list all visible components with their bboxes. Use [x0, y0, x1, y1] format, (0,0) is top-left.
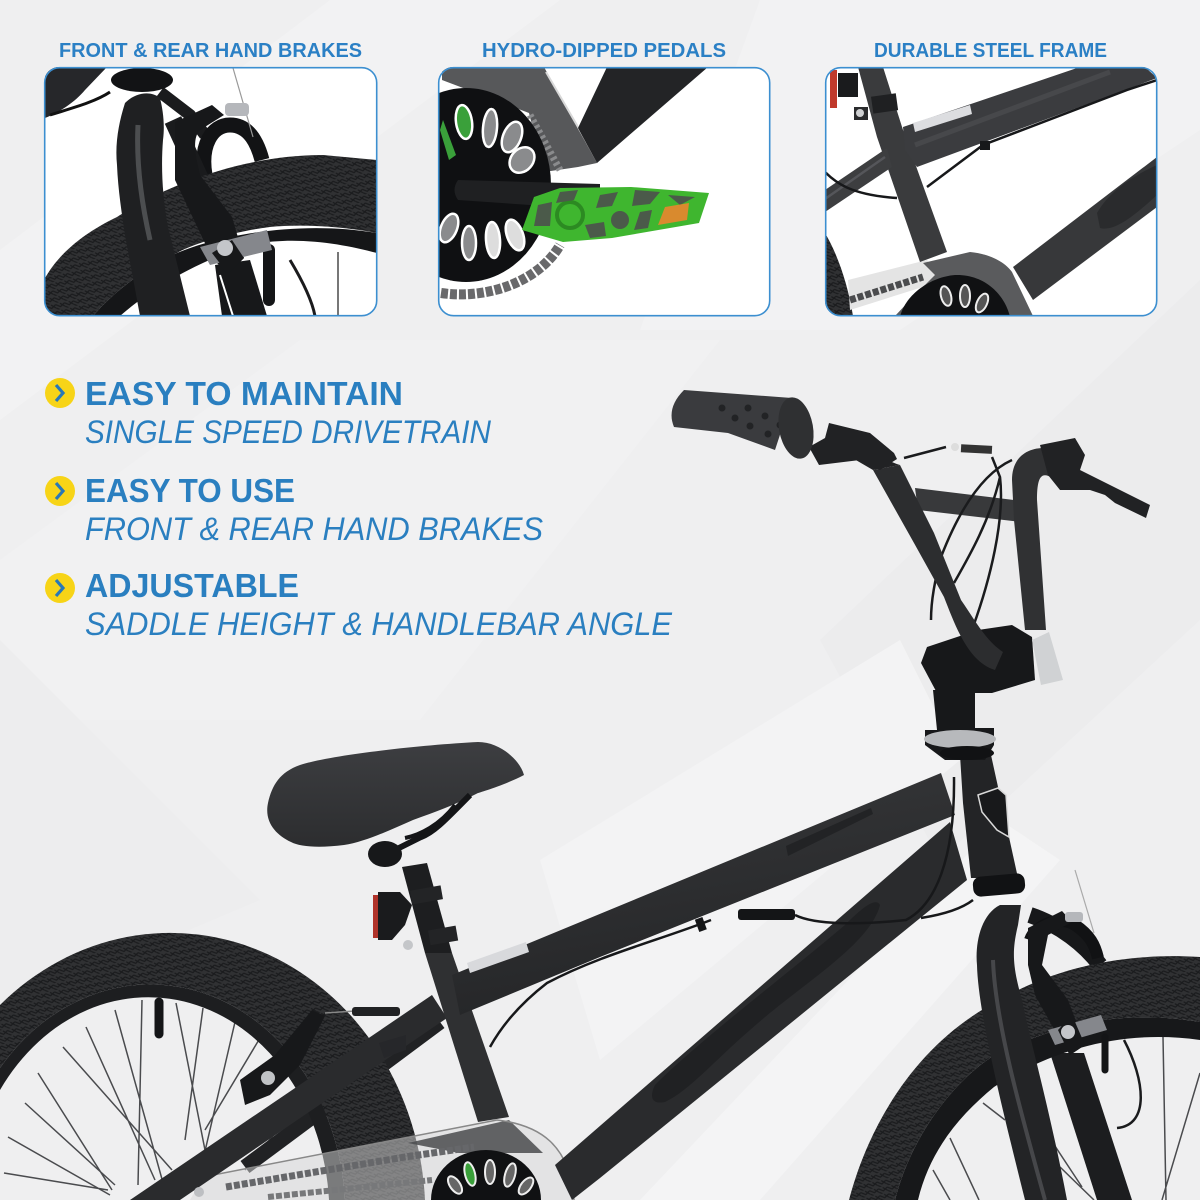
panel: brake close-up [44, 67, 377, 316]
feature: adjustable: ADJUSTABLE [85, 567, 299, 604]
feature: easy to maintain: EASY TO MAINTAIN [85, 375, 403, 412]
tire [0, 933, 425, 1200]
brake arm [175, 105, 244, 274]
down tube [555, 822, 967, 1200]
icon: chevron 1 [45, 378, 75, 408]
rear wheel [0, 933, 440, 1200]
sticker [913, 105, 972, 132]
fork rear leg [1050, 1053, 1132, 1200]
sprocket [440, 88, 551, 282]
seat tube and post [858, 67, 947, 262]
sticker [467, 942, 529, 973]
rear thin stay [245, 1022, 440, 1167]
cable [825, 80, 1157, 198]
sprocket [431, 1150, 541, 1200]
rim [0, 984, 345, 1200]
seat post [402, 863, 452, 953]
rim [93, 228, 377, 316]
feature list [45, 375, 673, 642]
fork [977, 870, 1107, 1200]
rear fork leg [215, 260, 267, 316]
top tube [452, 773, 955, 1015]
handlebar [672, 390, 1150, 693]
rear brake [240, 1010, 325, 1105]
brake arch [1030, 921, 1098, 958]
saddle [267, 742, 524, 867]
cables [490, 777, 973, 1047]
seat stay [130, 995, 447, 1200]
valve [154, 1002, 164, 1034]
chain guard and sprocket [848, 260, 935, 310]
front wheel [849, 915, 1200, 1200]
feature: easy to use: EASY TO USE [85, 472, 295, 509]
fork tube [116, 93, 190, 316]
heading: front and rear hand brakes: FRONT & REAR HAND BRAKES [59, 40, 362, 62]
crossbar [915, 488, 1030, 523]
head tube [960, 755, 1018, 878]
icon: chevron 3 [45, 573, 75, 603]
panel: steel frame close-up [825, 67, 1157, 317]
feature: easy to use: FRONT & REAR HAND BRAKES [85, 511, 543, 547]
brake lever [809, 423, 897, 470]
front brake [1028, 911, 1085, 1055]
bike frame [130, 690, 1026, 1200]
green pedal [522, 187, 709, 242]
seat tube [425, 953, 509, 1122]
crank arm [454, 180, 600, 205]
reflector [830, 70, 837, 108]
feature: easy to use [85, 472, 543, 547]
feature: adjustable: SADDLE HEIGHT & HANDLEBAR ANGLE [85, 606, 673, 642]
heading: hydro-dipped pedals: HYDRO-DIPPED PEDALS [482, 40, 726, 62]
heading: durable steel frame: DURABLE STEEL FRAME [874, 40, 1107, 62]
reflector [1032, 632, 1063, 685]
badge [978, 788, 1009, 837]
saddle rails [395, 795, 470, 850]
rear brake cable [325, 1011, 355, 1013]
top tube emboss [786, 808, 873, 856]
down tube flame emboss [652, 902, 880, 1103]
rim [895, 1017, 1200, 1200]
feature: easy to maintain [85, 375, 492, 450]
bike photo [0, 390, 1200, 1200]
stem [921, 625, 1035, 693]
feature: easy to maintain: SINGLE SPEED DRIVETRAIN [85, 414, 492, 450]
icon: chevron 2 [45, 476, 75, 506]
chain [441, 245, 560, 294]
right grip [1040, 438, 1150, 518]
headset [925, 690, 994, 760]
chain guard [190, 1120, 574, 1200]
panel: pedal close-up [438, 66, 770, 316]
feature: adjustable [85, 567, 673, 642]
tire [849, 956, 1200, 1200]
seat reflector [373, 892, 413, 950]
thin rear frame tube [826, 152, 888, 211]
tire corner [825, 233, 853, 316]
down tube [1013, 157, 1157, 300]
chain guard [442, 67, 597, 172]
right upright [1012, 448, 1060, 630]
cables [904, 447, 1012, 627]
tire [44, 155, 377, 316]
left upright [873, 465, 1003, 670]
top tube [903, 67, 1157, 167]
left grip [672, 390, 818, 461]
frame emboss [1097, 165, 1157, 229]
frame tube [578, 67, 708, 163]
